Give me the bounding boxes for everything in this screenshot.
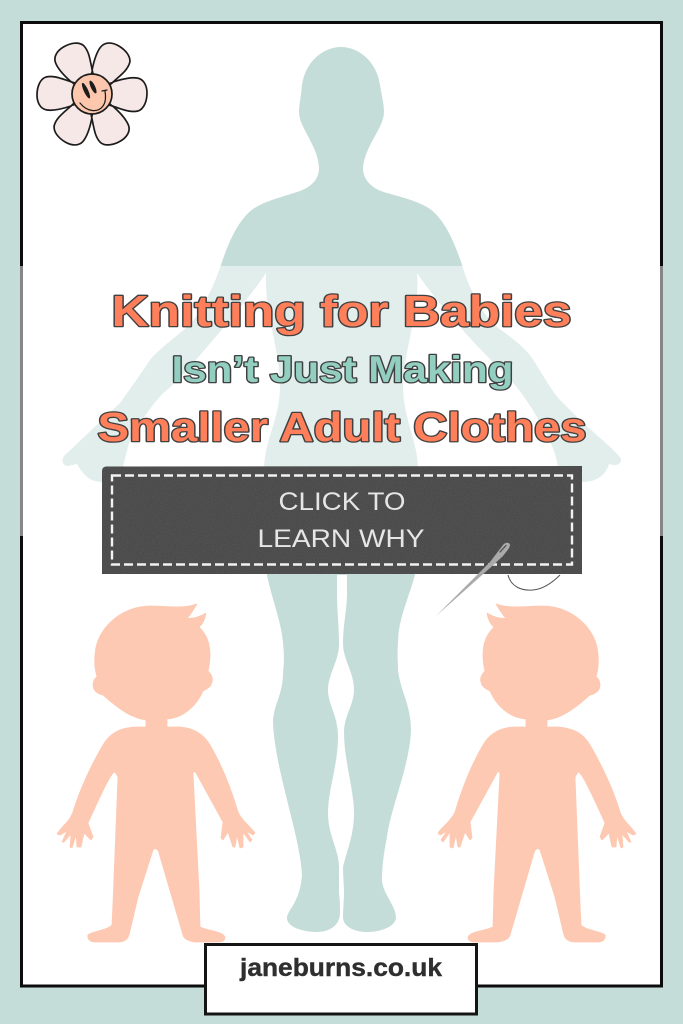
baby silhouette left — [57, 604, 255, 942]
title line 3: Smaller Adult Clothes — [98, 404, 586, 450]
title line 1: Knitting for Babies — [112, 287, 572, 336]
icon: needle — [436, 543, 510, 616]
title line 2: Isn’t Just Making — [172, 349, 514, 390]
translucent white band — [20, 266, 663, 536]
url text: janeburns.co.uk — [239, 954, 442, 982]
title — [98, 287, 586, 450]
baby silhouette right — [438, 604, 636, 942]
call to action patch — [102, 466, 582, 574]
button text line 1: CLICK TO — [278, 488, 406, 516]
footer url box — [206, 944, 476, 1014]
icon: smiling flower — [37, 38, 147, 150]
adult body silhouette — [62, 47, 621, 932]
stitched dashed border — [112, 476, 572, 564]
icon: thread — [508, 575, 560, 590]
button text line 2: LEARN WHY — [258, 525, 425, 553]
